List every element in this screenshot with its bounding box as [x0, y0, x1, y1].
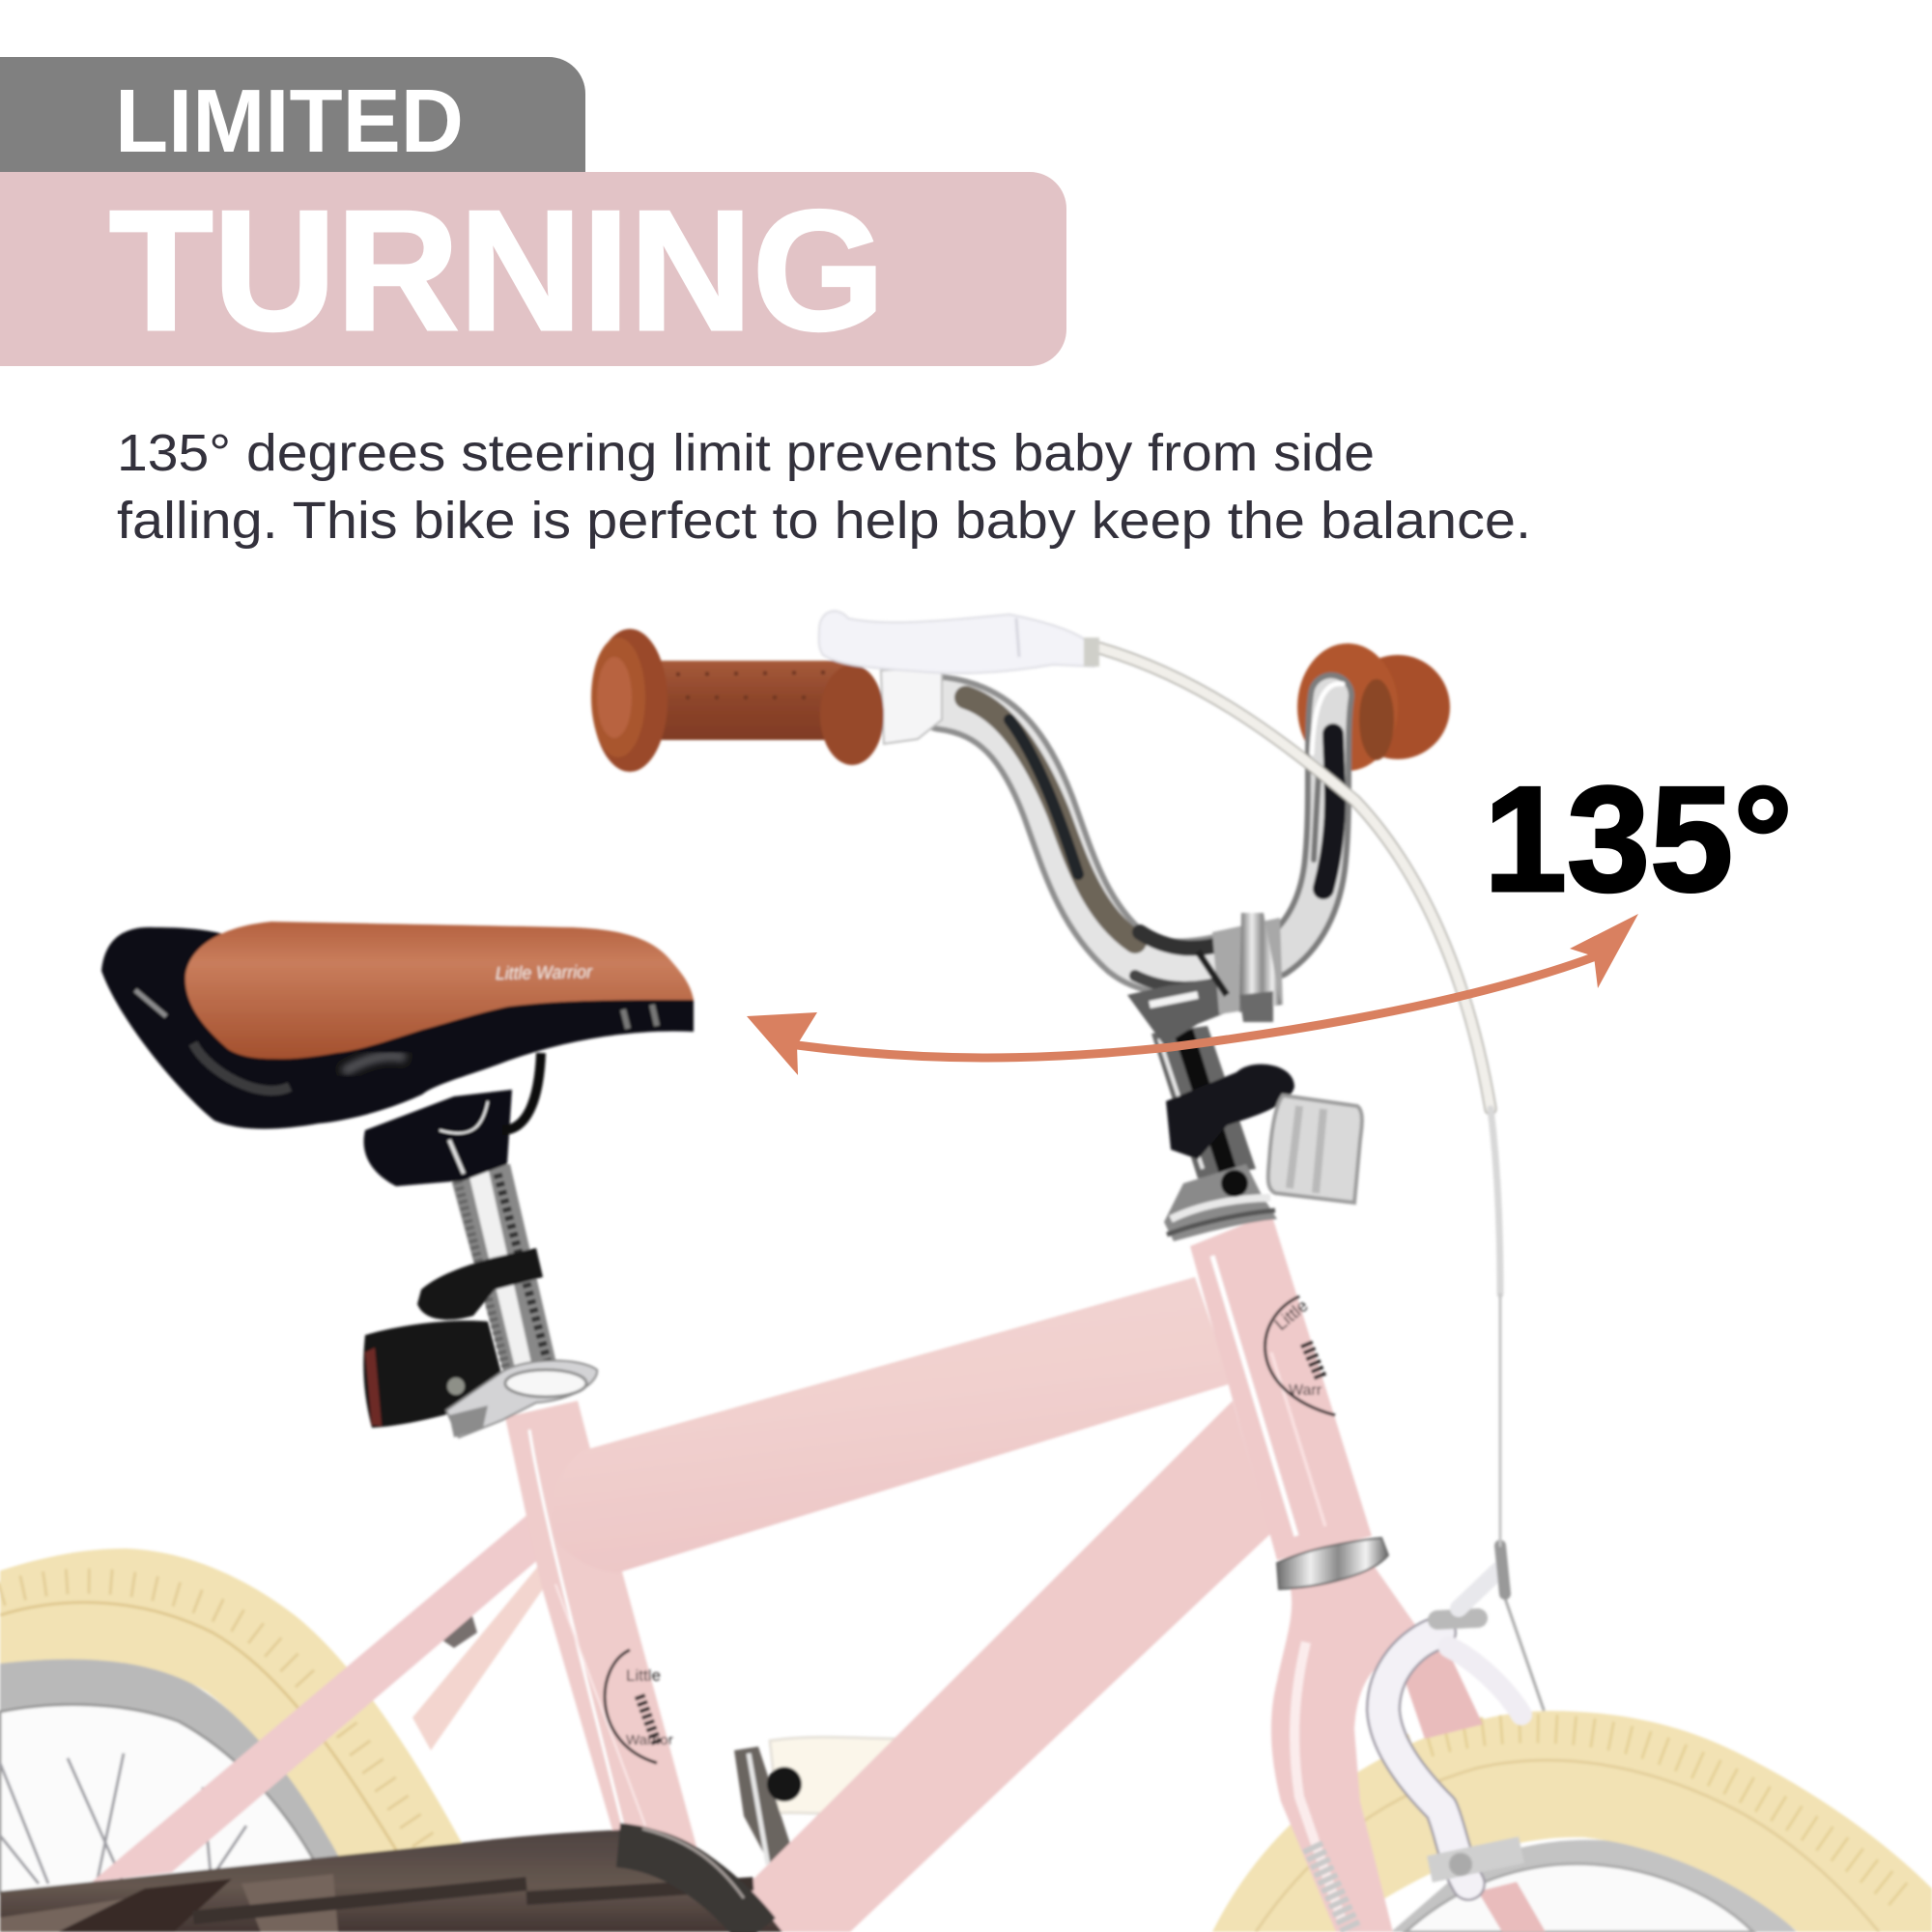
chain guard	[0, 1829, 782, 1932]
down tube	[700, 1401, 1270, 1932]
rear reflector	[363, 1321, 507, 1428]
lower stem tubes	[1151, 1026, 1256, 1179]
front frame logo stamp	[1265, 1295, 1335, 1415]
seat post	[448, 1164, 558, 1381]
saddle under clamp	[364, 1053, 541, 1186]
second seat stay	[412, 1565, 543, 1750]
stay bracket	[442, 1613, 477, 1648]
description text: 135° degrees steering limit prevents baby from side	[117, 424, 1375, 482]
handlebar right side	[1275, 684, 1343, 956]
rear wheel	[0, 1548, 466, 1893]
fork rear leg	[1397, 1633, 1483, 1739]
front reflector bracket	[1166, 1065, 1294, 1159]
fork lower rear leg	[1478, 1882, 1546, 1932]
front wheel	[1212, 1711, 1932, 1932]
brake lever clamp	[881, 667, 942, 744]
heading tab: turning: TURNING	[109, 175, 885, 366]
rear frame logo stamp: Little	[626, 1666, 661, 1685]
seat stay	[92, 1515, 541, 1882]
pedal and crank	[734, 1737, 900, 1879]
brake cable	[1096, 647, 1500, 1546]
lower headset ring	[1277, 1538, 1388, 1589]
description text	[117, 424, 1531, 550]
top tube	[552, 1277, 1232, 1573]
rotation arrow	[747, 914, 1638, 1075]
saddle top	[185, 922, 694, 1059]
saddle top: Little Warrior	[496, 962, 593, 984]
left grip	[591, 629, 884, 772]
front reflector	[1268, 1095, 1362, 1203]
right arrowhead	[1570, 914, 1638, 988]
rear frame logo stamp	[605, 1650, 673, 1763]
seat collar	[446, 1360, 597, 1437]
heading tab: limited	[0, 57, 585, 172]
right grip	[1297, 643, 1450, 771]
stem clamp	[1127, 913, 1283, 1045]
fork	[1271, 1560, 1415, 1932]
front frame logo stamp: Little	[1271, 1295, 1312, 1334]
seat tube	[505, 1401, 697, 1850]
seat post clamp band	[417, 1248, 543, 1320]
bike photo illustration	[0, 611, 1932, 1932]
head tube	[1190, 1213, 1372, 1560]
brake lever	[819, 611, 1099, 673]
angle label: 135°	[1484, 755, 1793, 923]
headset collar	[1164, 1164, 1277, 1241]
saddle base	[101, 927, 694, 1129]
brake calliper	[1383, 1546, 1544, 1884]
rear frame logo stamp: Warrior	[626, 1732, 673, 1748]
heading tab: limited: LIMITED	[115, 71, 464, 171]
left arrowhead	[747, 1012, 817, 1075]
arrow arc	[797, 956, 1596, 1058]
description text: falling. This bike is perfect to help baby keep the balance.	[117, 492, 1531, 550]
handlebar left side	[942, 697, 1232, 987]
front frame logo stamp: Warr	[1289, 1382, 1322, 1399]
